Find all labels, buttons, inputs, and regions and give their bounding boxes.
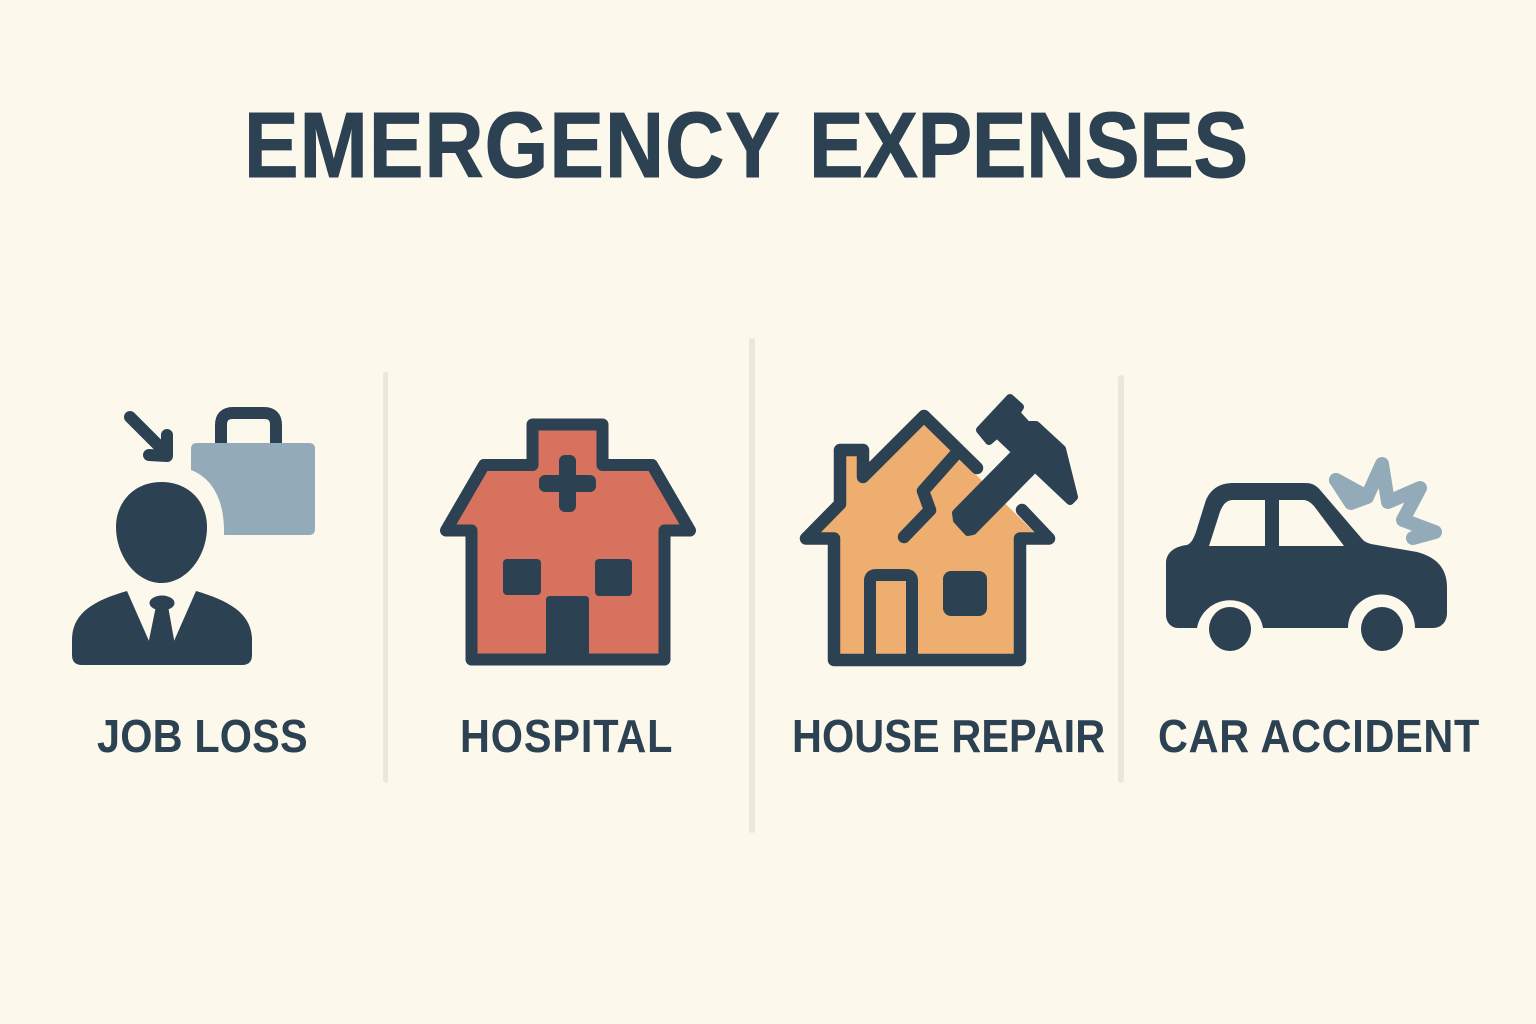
house door — [870, 575, 912, 660]
title: EXPENSES — [809, 93, 1248, 197]
icon: car with impact spark — [1166, 464, 1447, 651]
panel: car accident — [1158, 464, 1480, 763]
label: house repair: HOUSE REPAIR — [792, 711, 1105, 763]
panel: hospital — [446, 424, 690, 763]
icon: briefcase — [191, 413, 315, 535]
label: car accident: CAR ACCIDENT — [1158, 711, 1480, 763]
hospital door — [546, 596, 589, 660]
house outline — [806, 416, 1049, 660]
icon: medical cross — [539, 455, 596, 512]
car body — [1166, 483, 1447, 628]
panel: house repair — [792, 398, 1105, 763]
title — [244, 93, 1248, 197]
house window — [943, 571, 987, 616]
hospital outline — [446, 424, 690, 660]
label: hospital: HOSPITAL — [460, 711, 672, 763]
icon: person suit and tie — [72, 591, 252, 665]
hospital windows — [503, 559, 632, 596]
icon: hammer — [956, 398, 1074, 532]
house fill — [806, 416, 1036, 660]
title: EMERGENCY — [244, 93, 780, 197]
icon: damaged house with hammer — [806, 398, 1074, 660]
icon: job loss person with briefcase — [72, 413, 315, 665]
roof crack — [904, 455, 955, 537]
icon: arrow pointing down to person — [130, 417, 167, 456]
icon: person head — [116, 482, 207, 583]
car wheels — [1209, 607, 1403, 651]
label: job loss: JOB LOSS — [97, 711, 308, 763]
icon: impact spark — [1336, 464, 1435, 538]
icon: hospital building — [446, 424, 690, 660]
panel: job loss — [72, 413, 315, 763]
